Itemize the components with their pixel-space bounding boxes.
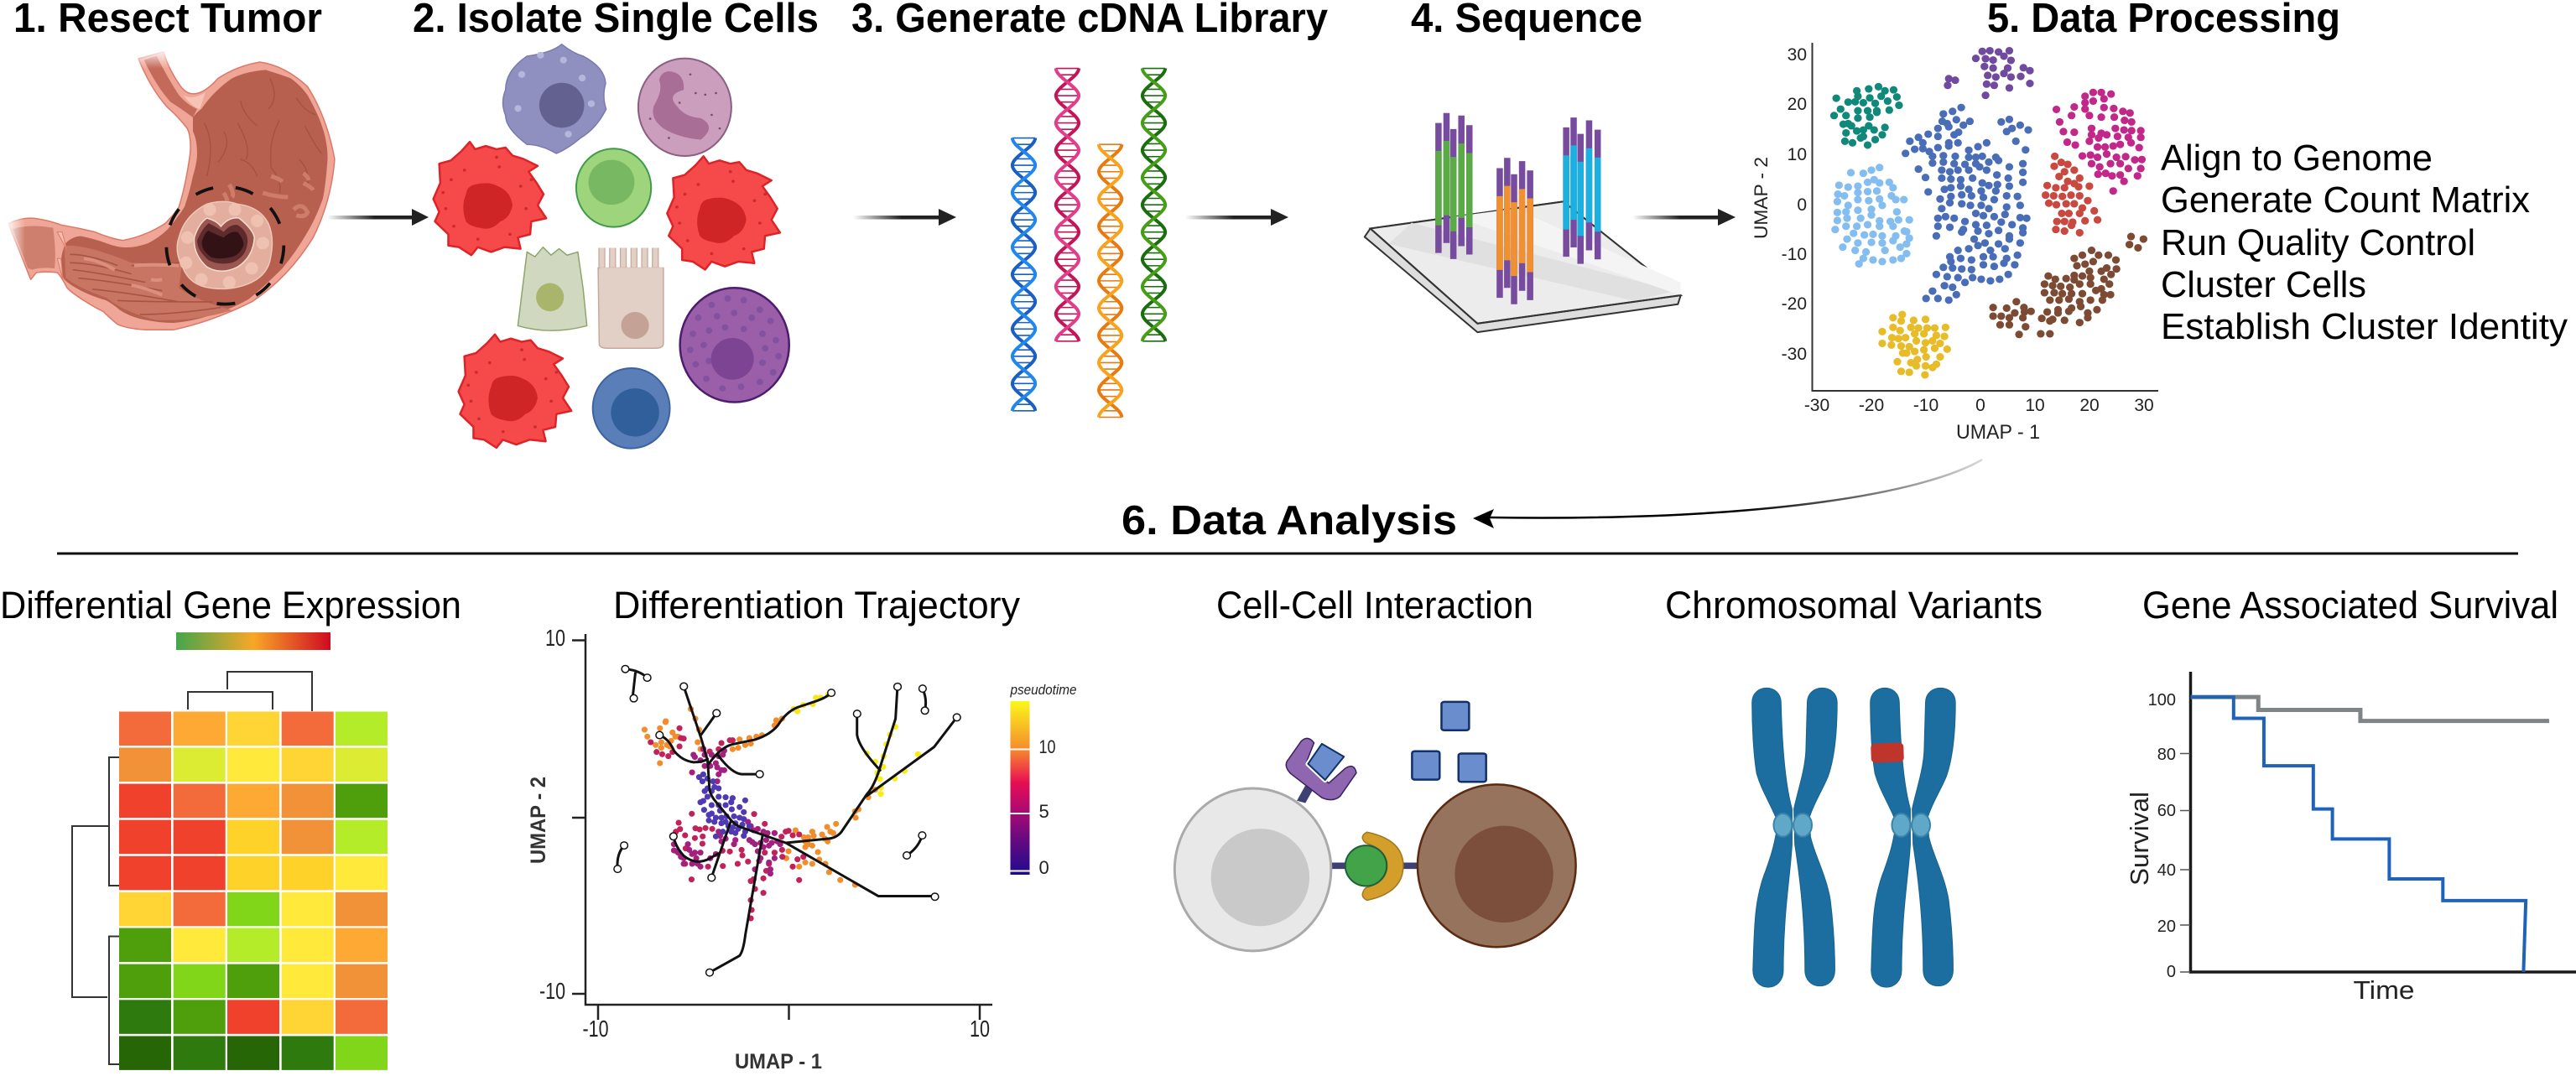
x-axis tick labels: -20 bbox=[1859, 396, 1884, 415]
heading: 6. Data Analysis: 6. Data Analysis bbox=[1121, 498, 1457, 543]
chart: differentiation trajectory bbox=[527, 625, 1077, 1073]
heading: Chromosomal Variants: Chromosomal Variants bbox=[1665, 584, 2043, 626]
axes and ticks bbox=[2191, 672, 2576, 972]
tick labels: 0 bbox=[2167, 963, 2176, 981]
heading: Differentiation Trajectory: Differentiation Trajectory bbox=[613, 584, 1020, 626]
icon: tumor cell 2 bbox=[667, 156, 780, 269]
icon: blue lymphocyte bbox=[593, 368, 670, 449]
pseudotime points, main cloud bbox=[644, 722, 918, 918]
x-axis tick labels: -30 bbox=[1804, 396, 1829, 415]
tick labels bbox=[2148, 691, 2176, 981]
arrow: data processing to data analysis bbox=[1473, 460, 1982, 528]
x-axis tick labels: 20 bbox=[2079, 396, 2100, 415]
chart: differential expression heatmap bbox=[72, 632, 388, 1070]
trajectory graph bbox=[617, 669, 957, 973]
y-axis tick labels: -10 bbox=[1782, 245, 1807, 264]
stomach lumen bbox=[60, 70, 328, 323]
pseudotime legend: 0 bbox=[1038, 857, 1049, 878]
arrow: sequencer to data processing bbox=[1632, 209, 1736, 226]
axes bbox=[1812, 43, 2158, 391]
icon: columnar cell with microvilli bbox=[598, 247, 664, 348]
x-axis tick labels: 30 bbox=[2134, 396, 2154, 415]
x-axis tick labels: -10 bbox=[1913, 396, 1939, 415]
grey and blue survival curves bbox=[2191, 697, 2549, 972]
tick labels: 10 bbox=[545, 625, 565, 651]
icon: pink helix bbox=[1056, 69, 1079, 341]
tick labels: -10 bbox=[539, 978, 565, 1004]
esophagus lumen bbox=[144, 56, 197, 117]
lower stomach folds bbox=[65, 246, 232, 320]
panel: sequencing flow cell bbox=[1365, 113, 1681, 332]
heading: Gene Associated Survival: Gene Associated Survival bbox=[2142, 584, 2558, 626]
y-axis title: Survival bbox=[2125, 792, 2154, 886]
icon: epithelial cell bbox=[518, 247, 587, 330]
y-axis tick labels: 30 bbox=[1788, 45, 1807, 65]
chart: survival curve bbox=[2125, 672, 2576, 1005]
receptor stalks bbox=[1301, 787, 1418, 865]
flow cell plate bbox=[1365, 201, 1681, 332]
icon: normal chromosome bbox=[1752, 688, 1837, 987]
icon: granulated purple cell bbox=[680, 288, 789, 403]
pseudotime legend: 10 bbox=[1038, 736, 1055, 757]
icon: green helix bbox=[1142, 69, 1165, 341]
x-axis tick labels bbox=[1804, 396, 2154, 415]
x-axis tick labels: 0 bbox=[1975, 396, 1985, 415]
icon: tumor cell 1 bbox=[434, 142, 546, 255]
panel: cDNA library helices bbox=[1012, 69, 1165, 418]
heatmap cells bbox=[119, 711, 388, 1070]
text block: data processing steps bbox=[2161, 138, 2568, 347]
icon: chromosome with variant bbox=[1871, 688, 1955, 987]
tick labels: 80 bbox=[2157, 746, 2176, 764]
upper stomach wrinkles bbox=[204, 78, 321, 193]
gold receptor bbox=[1362, 832, 1403, 900]
tick labels: 10 bbox=[970, 1016, 990, 1042]
fades at cut ends bbox=[134, 48, 170, 69]
pseudotime legend: pseudotime bbox=[1010, 682, 1077, 698]
icon: stomach with tumor bbox=[6, 48, 335, 330]
oligo clusters: green, orange, cyan bbox=[1439, 113, 1598, 304]
text block: data processing steps: Align to Genome bbox=[2161, 138, 2433, 179]
icon: green lymphocyte bbox=[576, 148, 651, 227]
icon: tumor cell 3 bbox=[459, 335, 571, 448]
pseudotime points, upper part bbox=[666, 694, 829, 721]
y-axis title: UMAP - 2 bbox=[1751, 157, 1772, 239]
dashed resection margin bbox=[166, 187, 284, 304]
pseudotime legend bbox=[1010, 682, 1077, 878]
x-axis tick labels: 10 bbox=[2025, 396, 2045, 415]
receiver cell bbox=[1418, 784, 1576, 947]
y-axis tick labels: -20 bbox=[1782, 294, 1807, 314]
diagram: cell-cell interaction bbox=[1174, 702, 1576, 951]
tick labels: 100 bbox=[2148, 691, 2176, 710]
icon: neutrophil bbox=[638, 59, 731, 156]
tick labels: -10 bbox=[582, 1016, 609, 1042]
icon: blue helix bbox=[1012, 138, 1035, 411]
scatter points by cluster bbox=[1834, 50, 2144, 375]
panel: isolated single cells bbox=[434, 44, 789, 449]
chart: UMAP clusters bbox=[1751, 43, 2158, 444]
heading: Differential Gene Expression: Differential Gene Expression bbox=[0, 584, 461, 626]
pseudotime legend: 5 bbox=[1038, 801, 1049, 822]
axis titles bbox=[527, 777, 822, 1073]
tick labels bbox=[539, 625, 990, 1042]
icon: orange helix bbox=[1099, 144, 1121, 418]
green ligand bbox=[1345, 845, 1387, 886]
purple receptor with bound ligand bbox=[1286, 738, 1356, 800]
axes and ticks bbox=[572, 634, 992, 1020]
tick labels: 20 bbox=[2157, 917, 2176, 936]
arrow: stomach to cells bbox=[327, 209, 429, 226]
axis titles: UMAP - 2 bbox=[527, 777, 550, 864]
x-axis title: UMAP - 1 bbox=[1956, 421, 2040, 444]
icon: macrophage bbox=[503, 44, 606, 153]
heading: Cell-Cell Interaction: Cell-Cell Interaction bbox=[1216, 584, 1533, 626]
text block: data processing steps: Establish Cluster Identity bbox=[2161, 306, 2568, 347]
y-axis tick labels: 0 bbox=[1797, 195, 1807, 215]
text block: data processing steps: Run Quality Control bbox=[2161, 222, 2475, 263]
y-axis tick labels bbox=[1782, 45, 1807, 364]
sender cell bbox=[1174, 788, 1331, 951]
column dendrogram bbox=[188, 672, 312, 711]
tick labels: 40 bbox=[2157, 861, 2176, 880]
arrow: cells to cDNA bbox=[853, 209, 956, 226]
y-axis tick labels: -30 bbox=[1782, 345, 1807, 364]
text block: data processing steps: Cluster Cells bbox=[2161, 264, 2366, 305]
arrow: cDNA to sequencer bbox=[1185, 209, 1288, 226]
y-axis tick labels: 10 bbox=[1788, 145, 1807, 164]
row dendrogram bbox=[72, 757, 119, 1064]
heatmap colour scale bbox=[176, 632, 330, 650]
duodenum bbox=[13, 226, 55, 270]
axis titles: UMAP - 1 bbox=[735, 1050, 822, 1073]
text block: data processing steps: Generate Count Matrix bbox=[2161, 179, 2530, 221]
tumor bbox=[177, 201, 272, 288]
x-axis title: Time bbox=[2354, 975, 2414, 1005]
y-axis tick labels: 20 bbox=[1788, 95, 1807, 114]
free ligands bbox=[1412, 702, 1486, 782]
tick labels: 60 bbox=[2157, 802, 2176, 820]
